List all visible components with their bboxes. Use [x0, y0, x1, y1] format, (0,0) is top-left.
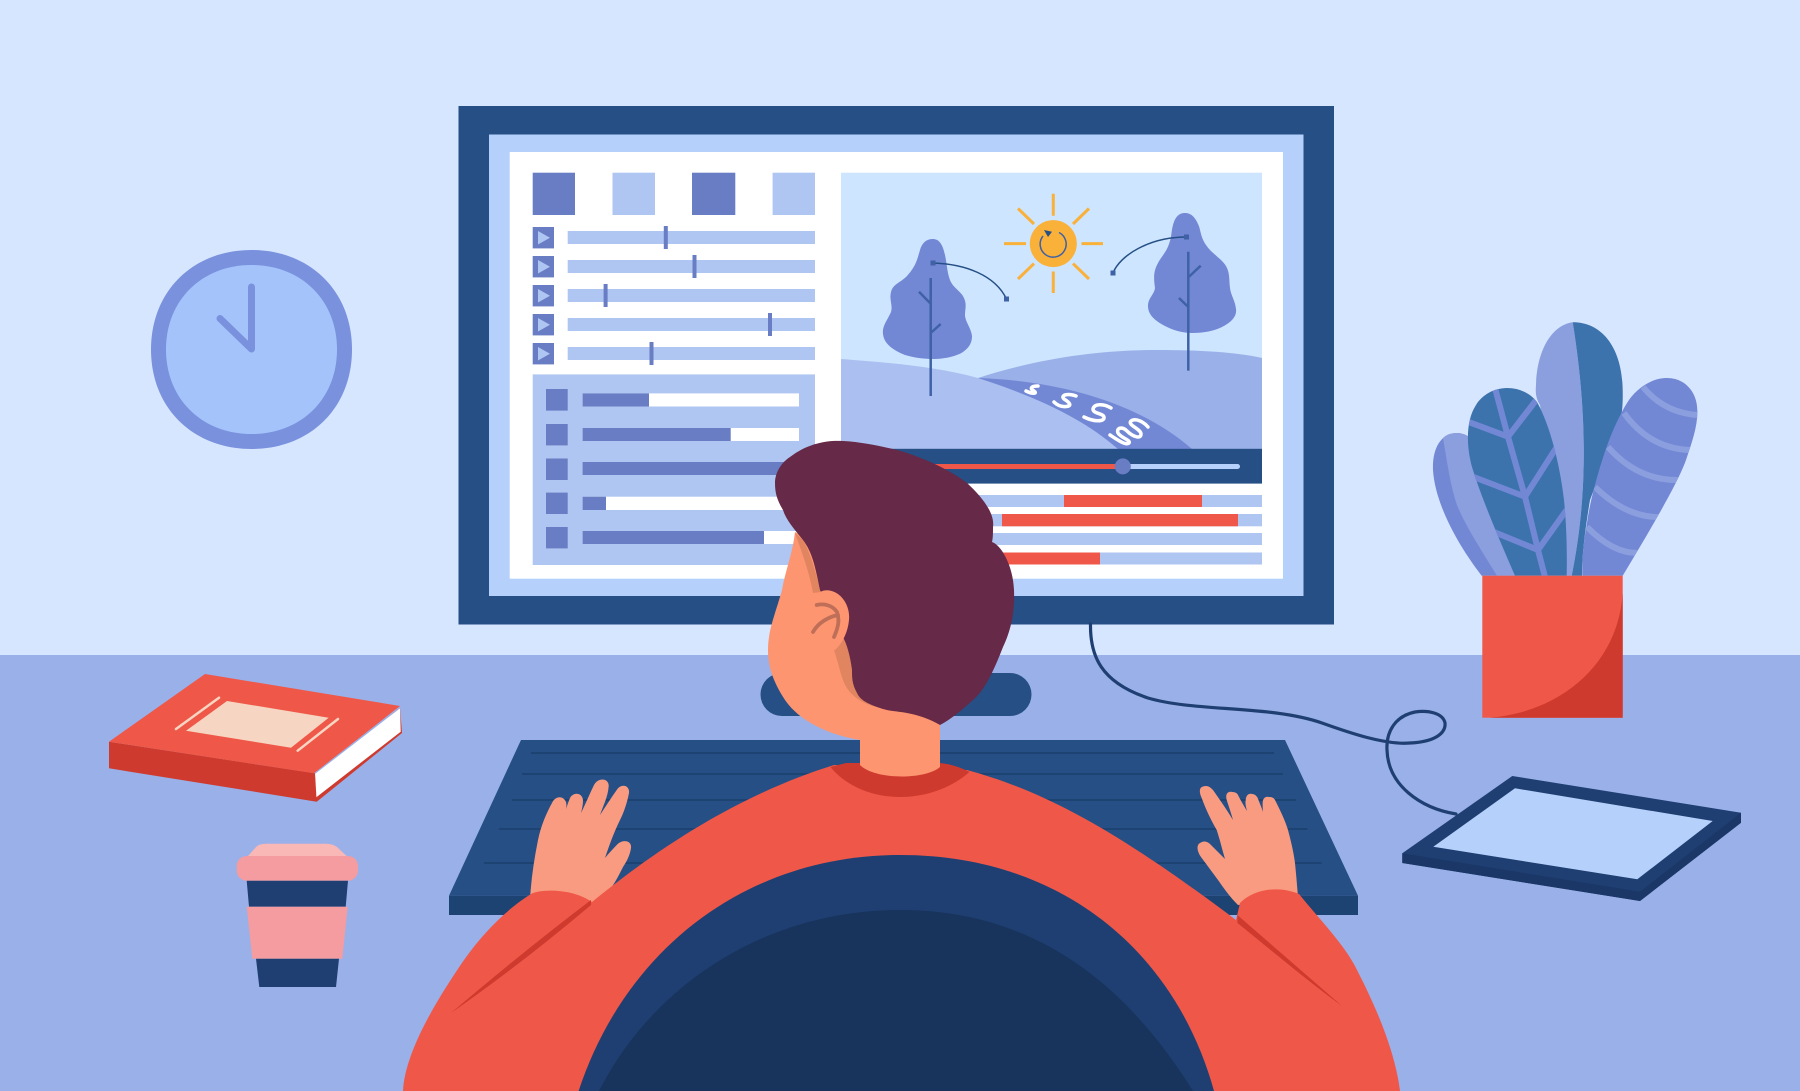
collar: [830, 763, 970, 797]
book: [109, 674, 402, 802]
tree right: [1148, 213, 1236, 371]
monitor frame: [458, 106, 1334, 624]
neck: [860, 715, 940, 777]
leaf: striped right: [1582, 378, 1698, 576]
leaf: tall centre: [1536, 322, 1623, 576]
monitor: [458, 106, 1334, 624]
sleeve crease left: [451, 900, 591, 1013]
chair back: [579, 855, 1214, 1091]
monitor stand base: [760, 673, 1032, 716]
book pages: [315, 708, 401, 798]
right hill: [978, 350, 1262, 449]
animation layer rows: [533, 226, 815, 365]
sun: [1004, 194, 1103, 293]
playback bar: [841, 449, 1262, 484]
right hand: [1198, 786, 1298, 905]
icon: wall clock: [151, 250, 352, 449]
book spine: [109, 742, 317, 802]
tablet: [1402, 776, 1741, 901]
chair inner: [599, 910, 1193, 1091]
left hand: [530, 779, 631, 905]
background wall: [0, 0, 1800, 655]
monitor bezel: [489, 134, 1304, 596]
motion path right: [1110, 234, 1189, 276]
leaf: back left: [1433, 433, 1516, 576]
shirt: [403, 765, 1400, 1091]
sleeve crease right: [1237, 915, 1342, 1006]
tree left: [883, 239, 972, 396]
river squiggles: [1026, 386, 1148, 444]
river: [978, 378, 1192, 449]
hair: [775, 441, 1014, 725]
face shadow lower: [834, 637, 880, 708]
sky: [841, 173, 1262, 449]
book label: [186, 701, 329, 748]
coffee cup: [237, 844, 358, 987]
book cover edge: [312, 708, 402, 802]
face: [768, 532, 940, 740]
left hill: [841, 359, 1118, 449]
leaf: veined: [1466, 388, 1568, 577]
person: [403, 441, 1400, 1091]
desk surface: [0, 655, 1800, 1091]
ear: [813, 590, 849, 650]
keyboard: [449, 740, 1358, 915]
book top: [109, 674, 400, 773]
preview scene: [841, 173, 1262, 449]
plant: [1433, 322, 1698, 718]
plant pot: [1482, 576, 1623, 718]
cable: [1090, 624, 1456, 814]
software window: [510, 152, 1283, 579]
timeline tracks: [880, 495, 1262, 564]
toolbar squares: [533, 173, 815, 215]
properties panel: [533, 374, 815, 565]
face shadow upper: [795, 533, 821, 593]
motion path left: [930, 260, 1009, 302]
